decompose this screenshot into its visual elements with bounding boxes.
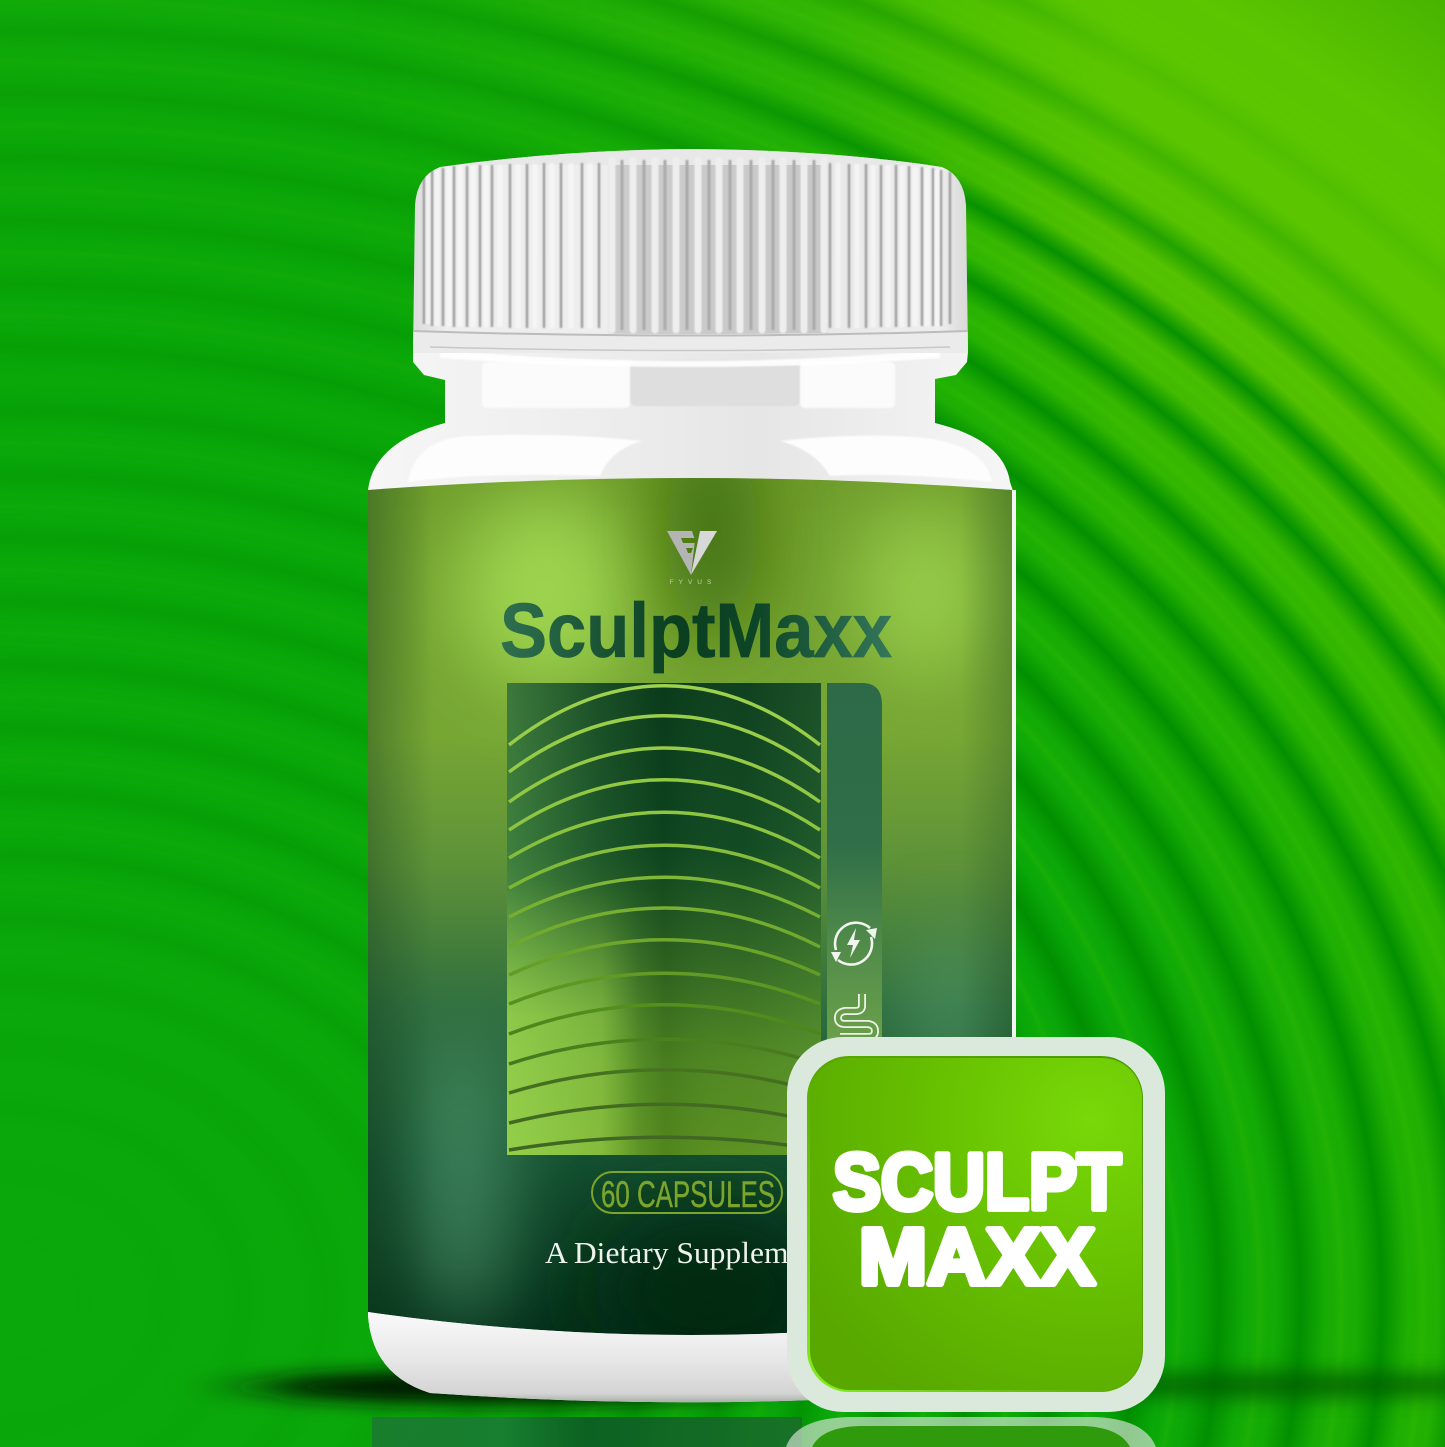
reflection of bottle — [372, 1417, 802, 1447]
logo wordmark: FYVUS — [670, 579, 716, 586]
neck highlights — [440, 350, 940, 408]
bottle cap — [413, 148, 968, 353]
label panel with arcs — [507, 683, 821, 1155]
product label — [368, 478, 1012, 1335]
badge text: sculpt: SCULPT — [833, 1137, 1121, 1226]
shoulder highlights — [408, 435, 992, 482]
product name: SculptMaxx — [500, 588, 892, 674]
capsule count text: 60 CAPSULES — [601, 1174, 775, 1215]
cap ridges: centre band — [612, 160, 824, 330]
bottle body — [368, 352, 1016, 1402]
capsule count pill — [592, 1172, 782, 1215]
badge — [787, 1037, 1165, 1412]
icon: intestine — [838, 993, 875, 1037]
product bottle — [368, 148, 1016, 1402]
arc lines — [509, 686, 820, 1150]
reflection of badge — [786, 1417, 1156, 1447]
cap ridges: dark grooves — [424, 163, 950, 328]
white right edge of label — [1012, 490, 1016, 1038]
supplement line: A Dietary Supplement — [545, 1235, 827, 1270]
cap ridges: light bars — [428, 163, 937, 328]
bottle base — [368, 1312, 1016, 1402]
side panel — [827, 683, 882, 1045]
floor shadow — [250, 1370, 1445, 1404]
brand logo — [667, 531, 717, 586]
badge text: maxx: MAXX — [859, 1212, 1095, 1301]
icon: energy cycle — [831, 923, 877, 965]
